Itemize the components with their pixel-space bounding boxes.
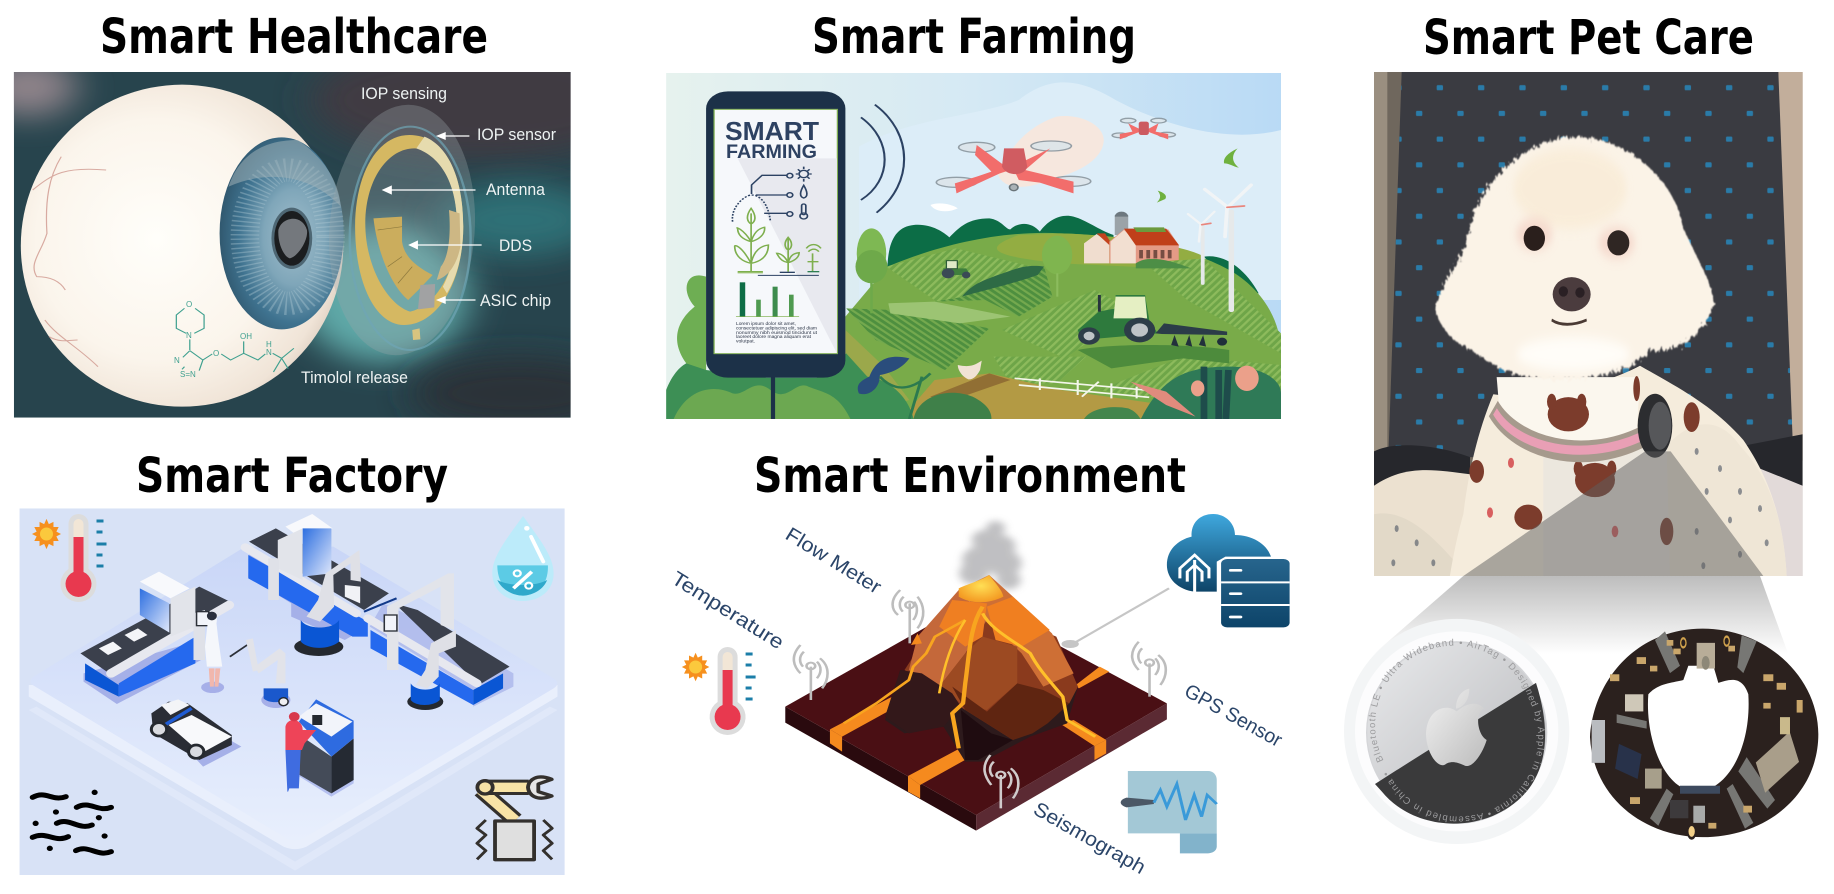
title: Smart Environment: Smart Environment bbox=[754, 448, 1186, 504]
dog collar bbox=[1493, 409, 1642, 451]
sky bbox=[666, 73, 1281, 419]
AirTag bbox=[1344, 619, 1569, 844]
phone body text: consectetuer adipiscing elit, sed diam bbox=[736, 326, 817, 330]
AirTag engraved ring text: Bluetooth LE • Ultra Wideband • AirTag • Designed by Apple in California • Assembled in China • bbox=[1368, 638, 1544, 822]
phone body text: nonummy nibh euismod tincidunt ut bbox=[736, 330, 818, 335]
contact lens device bbox=[329, 104, 475, 356]
molecule atom labels bbox=[174, 300, 272, 379]
label: GPS Sensor: GPS Sensor bbox=[1181, 680, 1286, 752]
molecule atom labels: H bbox=[266, 340, 272, 349]
panel: smart farming illustration bbox=[666, 73, 1281, 419]
phone heading: SMART FARMING: FARMING bbox=[726, 142, 817, 163]
title: Smart Farming: Smart Farming bbox=[812, 9, 1136, 65]
label: Temperature: Temperature bbox=[667, 568, 788, 654]
back robot arm bbox=[307, 550, 361, 622]
label: Timolol release: Timolol release bbox=[301, 369, 408, 387]
volcano bbox=[885, 575, 1078, 762]
humidity drop icon bbox=[492, 516, 554, 601]
wind turbines bbox=[1188, 185, 1251, 310]
label: Antenna: Antenna bbox=[486, 181, 546, 199]
vibration robot icon bbox=[477, 777, 552, 860]
label: Seismograph: Seismograph bbox=[1030, 798, 1149, 879]
lava streams bbox=[844, 607, 1095, 748]
fence and chicken bbox=[958, 361, 1149, 398]
dog head bbox=[1435, 137, 1714, 380]
label: IOP sensing: IOP sensing bbox=[361, 85, 447, 103]
zoom cone over photo bbox=[1463, 451, 1763, 576]
sensor antennas bbox=[794, 590, 1166, 808]
birds bbox=[1157, 148, 1239, 203]
small robot arm bbox=[230, 638, 290, 708]
phone sensor diagram bbox=[732, 167, 819, 275]
phone body text: Lorem ipsum dolor sit amet, bbox=[736, 321, 796, 326]
signal arcs bbox=[861, 105, 904, 213]
temperature icon bbox=[682, 647, 756, 735]
phone heading: SMART FARMING bbox=[725, 116, 819, 163]
molecule atom labels: N bbox=[266, 348, 272, 357]
sun bbox=[682, 653, 709, 681]
panel: smart environment illustration bbox=[667, 514, 1290, 879]
eyeball bbox=[21, 85, 344, 407]
molecule atom labels: O bbox=[213, 349, 219, 358]
phone bar chart bbox=[736, 282, 799, 317]
tree line bbox=[887, 216, 1259, 293]
right conveyor bbox=[364, 573, 513, 710]
title: Smart Pet Care: Smart Pet Care bbox=[1423, 10, 1754, 66]
phone heading: SMART FARMING: SMART bbox=[725, 116, 819, 146]
photo: dog with tracker bbox=[1374, 72, 1803, 576]
molecule atom labels: S=N bbox=[180, 370, 196, 379]
phone bbox=[706, 91, 845, 378]
timolol molecule bbox=[176, 308, 294, 372]
cloud and server icon bbox=[1167, 514, 1290, 627]
scientist figure bbox=[201, 611, 224, 693]
seismograph icon bbox=[1121, 771, 1217, 853]
isometric platform bbox=[29, 547, 557, 871]
drones bbox=[936, 118, 1175, 193]
lava slab bbox=[785, 600, 1167, 831]
cloud storage link line bbox=[1074, 588, 1169, 643]
temperature icon bbox=[32, 514, 106, 602]
phone pole bbox=[771, 377, 775, 419]
medical bed robot bbox=[151, 699, 241, 767]
panel: smart healthcare illustration bbox=[14, 72, 571, 418]
label: DDS: DDS bbox=[499, 237, 532, 255]
phone body text bbox=[736, 321, 818, 344]
back conveyor bbox=[245, 514, 389, 656]
thermometer bbox=[60, 514, 106, 602]
small tractor bbox=[942, 261, 970, 278]
control cabinet and worker bbox=[285, 699, 354, 797]
phone body text: volutpat. bbox=[736, 338, 755, 344]
large tractor with plough bbox=[1078, 295, 1227, 347]
barn bbox=[1084, 212, 1191, 268]
label: ASIC chip: ASIC chip bbox=[480, 292, 551, 310]
molecule atom labels: N bbox=[174, 356, 180, 365]
phone plants bbox=[735, 208, 821, 273]
foreground plants bbox=[666, 275, 1281, 419]
phone body text: laoreet dolore magna aliquam erat bbox=[736, 334, 812, 339]
thermometer bbox=[710, 647, 756, 735]
tracker pod bbox=[1638, 394, 1672, 458]
zoom cone below photo bbox=[1373, 576, 1788, 654]
molecule atom labels: O bbox=[186, 300, 192, 309]
background glow bbox=[14, 72, 571, 418]
title: Smart Factory: Smart Factory bbox=[136, 448, 448, 504]
molecule atom labels: OH bbox=[240, 332, 252, 341]
hills and fields bbox=[845, 233, 1281, 419]
sun bbox=[32, 519, 61, 549]
left conveyor bbox=[80, 572, 230, 704]
trees bbox=[855, 228, 1072, 313]
title: Smart Healthcare: Smart Healthcare bbox=[100, 9, 488, 65]
panel: smart factory illustration bbox=[20, 508, 565, 875]
smoke plume bbox=[959, 521, 1022, 589]
label arrows bbox=[382, 132, 482, 304]
label: IOP sensor: IOP sensor bbox=[477, 126, 556, 144]
molecule atom labels: N bbox=[186, 331, 192, 340]
circuit board bbox=[1590, 629, 1818, 838]
panel: smart pet care bbox=[1344, 72, 1818, 844]
label: Flow Meter: Flow Meter bbox=[781, 524, 885, 599]
air quality icon bbox=[33, 790, 111, 853]
dog body in shirt bbox=[1391, 366, 1787, 576]
